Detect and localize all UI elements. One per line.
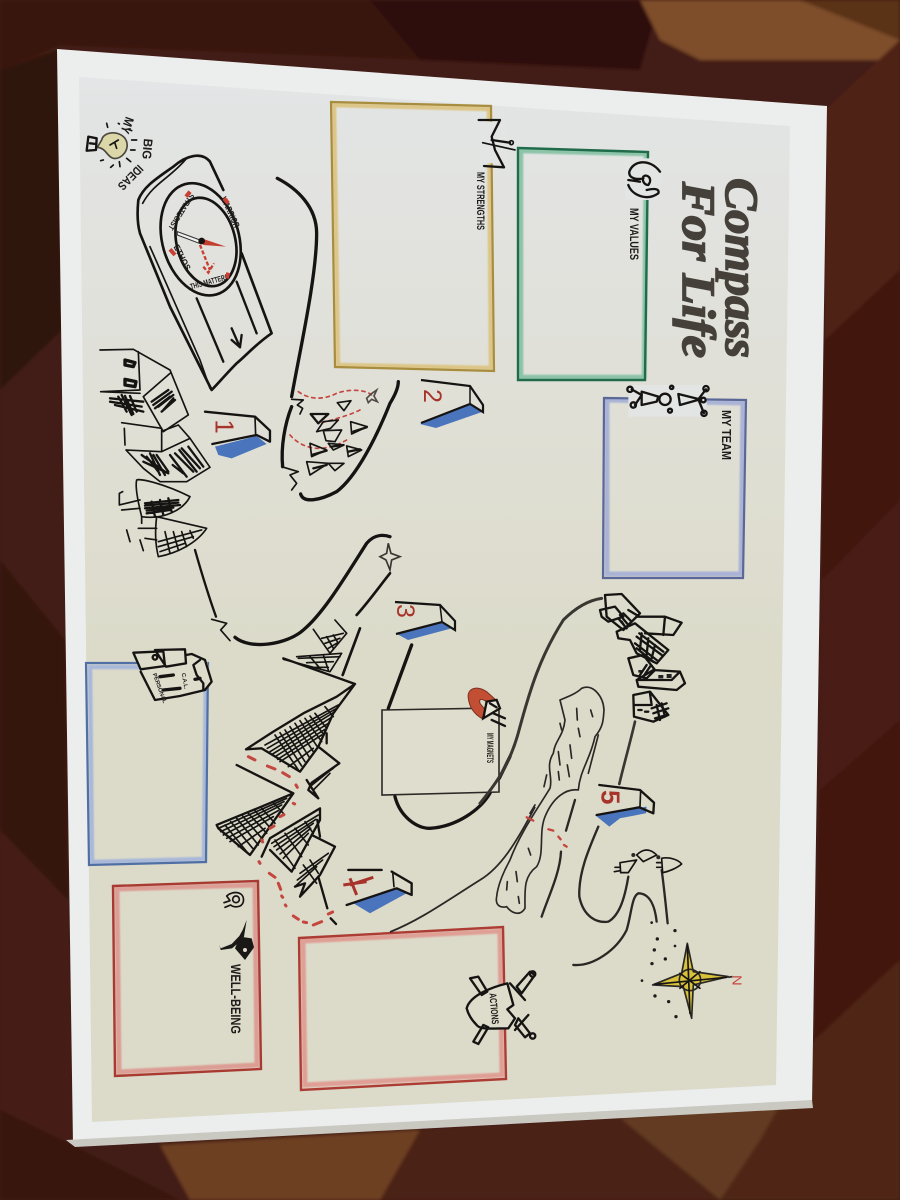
icon: tents at road end	[614, 850, 682, 873]
icon: backpack: C.A.L.	[180, 673, 189, 690]
icon: shield and swords: ACTIONS	[486, 993, 500, 1025]
printed area of map	[79, 77, 790, 1122]
sheet of paper	[57, 49, 827, 1145]
icon: compass: WARRIOR	[219, 195, 242, 230]
path segment: lower left road	[195, 535, 390, 645]
path segment: road around magnets	[388, 645, 510, 828]
trail lines past lake	[527, 800, 575, 917]
icon: shield and swords	[467, 971, 535, 1044]
icon: light bulb with my big ideas: MY	[117, 115, 136, 136]
label: well-being: WELL-BEING	[228, 964, 244, 1034]
icon: forest trees	[119, 480, 207, 557]
icon: climber on mountain	[479, 120, 515, 167]
icon: compass	[138, 156, 272, 390]
panel: well-being	[113, 881, 261, 1076]
icon: light bulb with my big ideas: IDEAS	[115, 162, 146, 193]
icon: magnet	[468, 688, 505, 726]
panel: my strengths	[331, 102, 515, 371]
dashed red trail through mountains	[248, 757, 333, 925]
path segment: camel shaped road	[573, 827, 668, 965]
icon: village houses	[100, 349, 210, 482]
icon: tents with red trail	[290, 390, 377, 475]
title: Compass For Life: For Life	[672, 181, 724, 358]
icon: north compass rose	[641, 921, 745, 1018]
path segment: hooked road	[282, 382, 398, 500]
marker 5	[595, 785, 654, 827]
icon: town buildings	[600, 594, 685, 722]
icon: star marker	[380, 543, 400, 570]
path segment: first road	[277, 178, 317, 397]
marker 1	[205, 412, 270, 458]
label: my strengths: MY STRENGTHS	[474, 172, 486, 230]
panel: blue backpack box	[86, 649, 213, 865]
icon: light bulb with my big ideas	[87, 115, 155, 193]
icon: river lake	[496, 687, 604, 913]
panel: my magnets	[382, 688, 505, 795]
icon: backpack: PERSONAL	[151, 673, 167, 705]
icon: light bulb with my big ideas: BIG	[139, 138, 155, 160]
path segment: lower road to actions	[390, 807, 535, 932]
icon: team figure	[627, 385, 709, 417]
icon: backpack	[133, 649, 213, 705]
panel: my team	[603, 385, 746, 578]
icon: hands holding heart	[625, 158, 660, 200]
marker 3	[391, 602, 455, 640]
panel: actions	[299, 927, 535, 1090]
icon: north compass rose: N	[730, 975, 745, 986]
icon: yoga pose	[219, 920, 254, 960]
path segment: road to town	[480, 598, 635, 803]
icon: compass: THIS MATTERS	[189, 272, 230, 291]
title: Compass For Life: Compass	[715, 178, 767, 358]
label: my team: MY TEAM	[719, 410, 734, 460]
path segment: mountain road	[317, 573, 390, 924]
marker 2	[418, 380, 483, 428]
title: Compass For Life	[672, 178, 767, 358]
marker 1: 1	[210, 419, 240, 434]
marker 5: 5	[595, 790, 625, 804]
marker 4	[343, 870, 412, 913]
icon: mountains	[217, 620, 355, 897]
icon: compass: STRATEGIST	[166, 192, 196, 232]
panel: my values	[518, 148, 660, 380]
panel: my magnets: MY MAGNETS	[485, 733, 495, 763]
marker 2: 2	[418, 389, 446, 403]
icon: small head	[224, 893, 243, 907]
marker 3: 3	[391, 604, 419, 618]
icon: compass: ETHOS	[172, 243, 193, 272]
label: my values: MY VALUES	[627, 208, 641, 260]
